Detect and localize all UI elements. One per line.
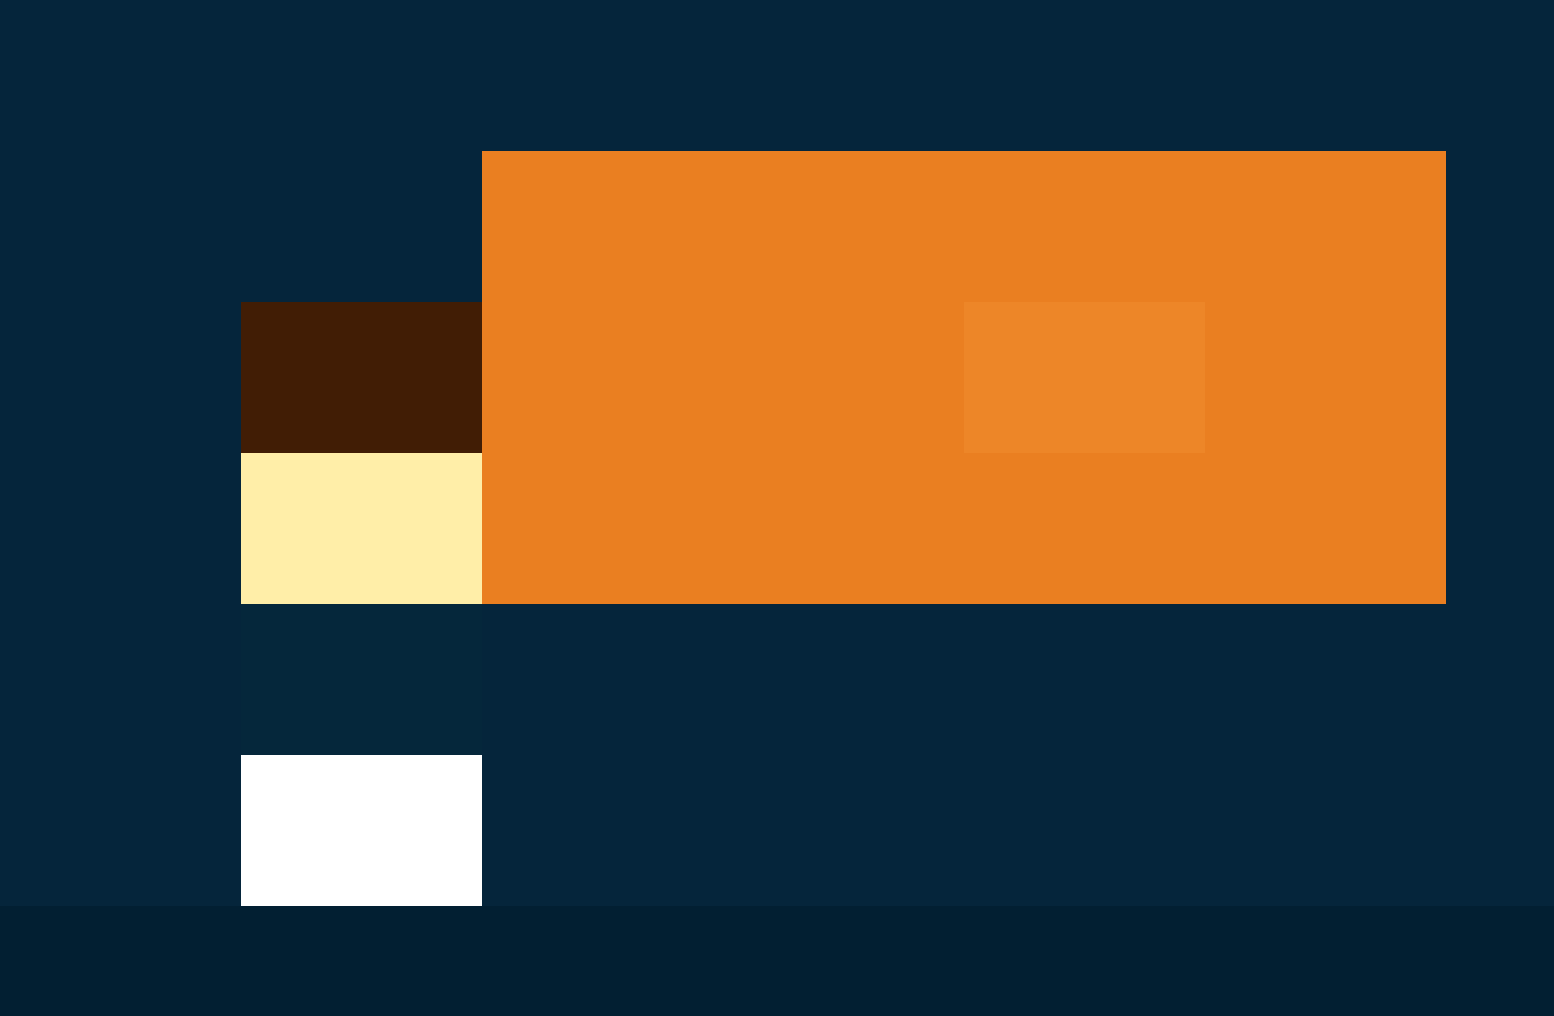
footer band bbox=[0, 906, 1554, 1016]
panel: white tile bbox=[241, 755, 482, 906]
panel: orange block bbox=[482, 151, 1446, 604]
panel: cream tile bbox=[241, 453, 482, 604]
panel: lighter orange inset bbox=[964, 302, 1205, 453]
panel: dark brown tile bbox=[241, 302, 482, 453]
panel: faint navy tile bbox=[241, 604, 482, 755]
